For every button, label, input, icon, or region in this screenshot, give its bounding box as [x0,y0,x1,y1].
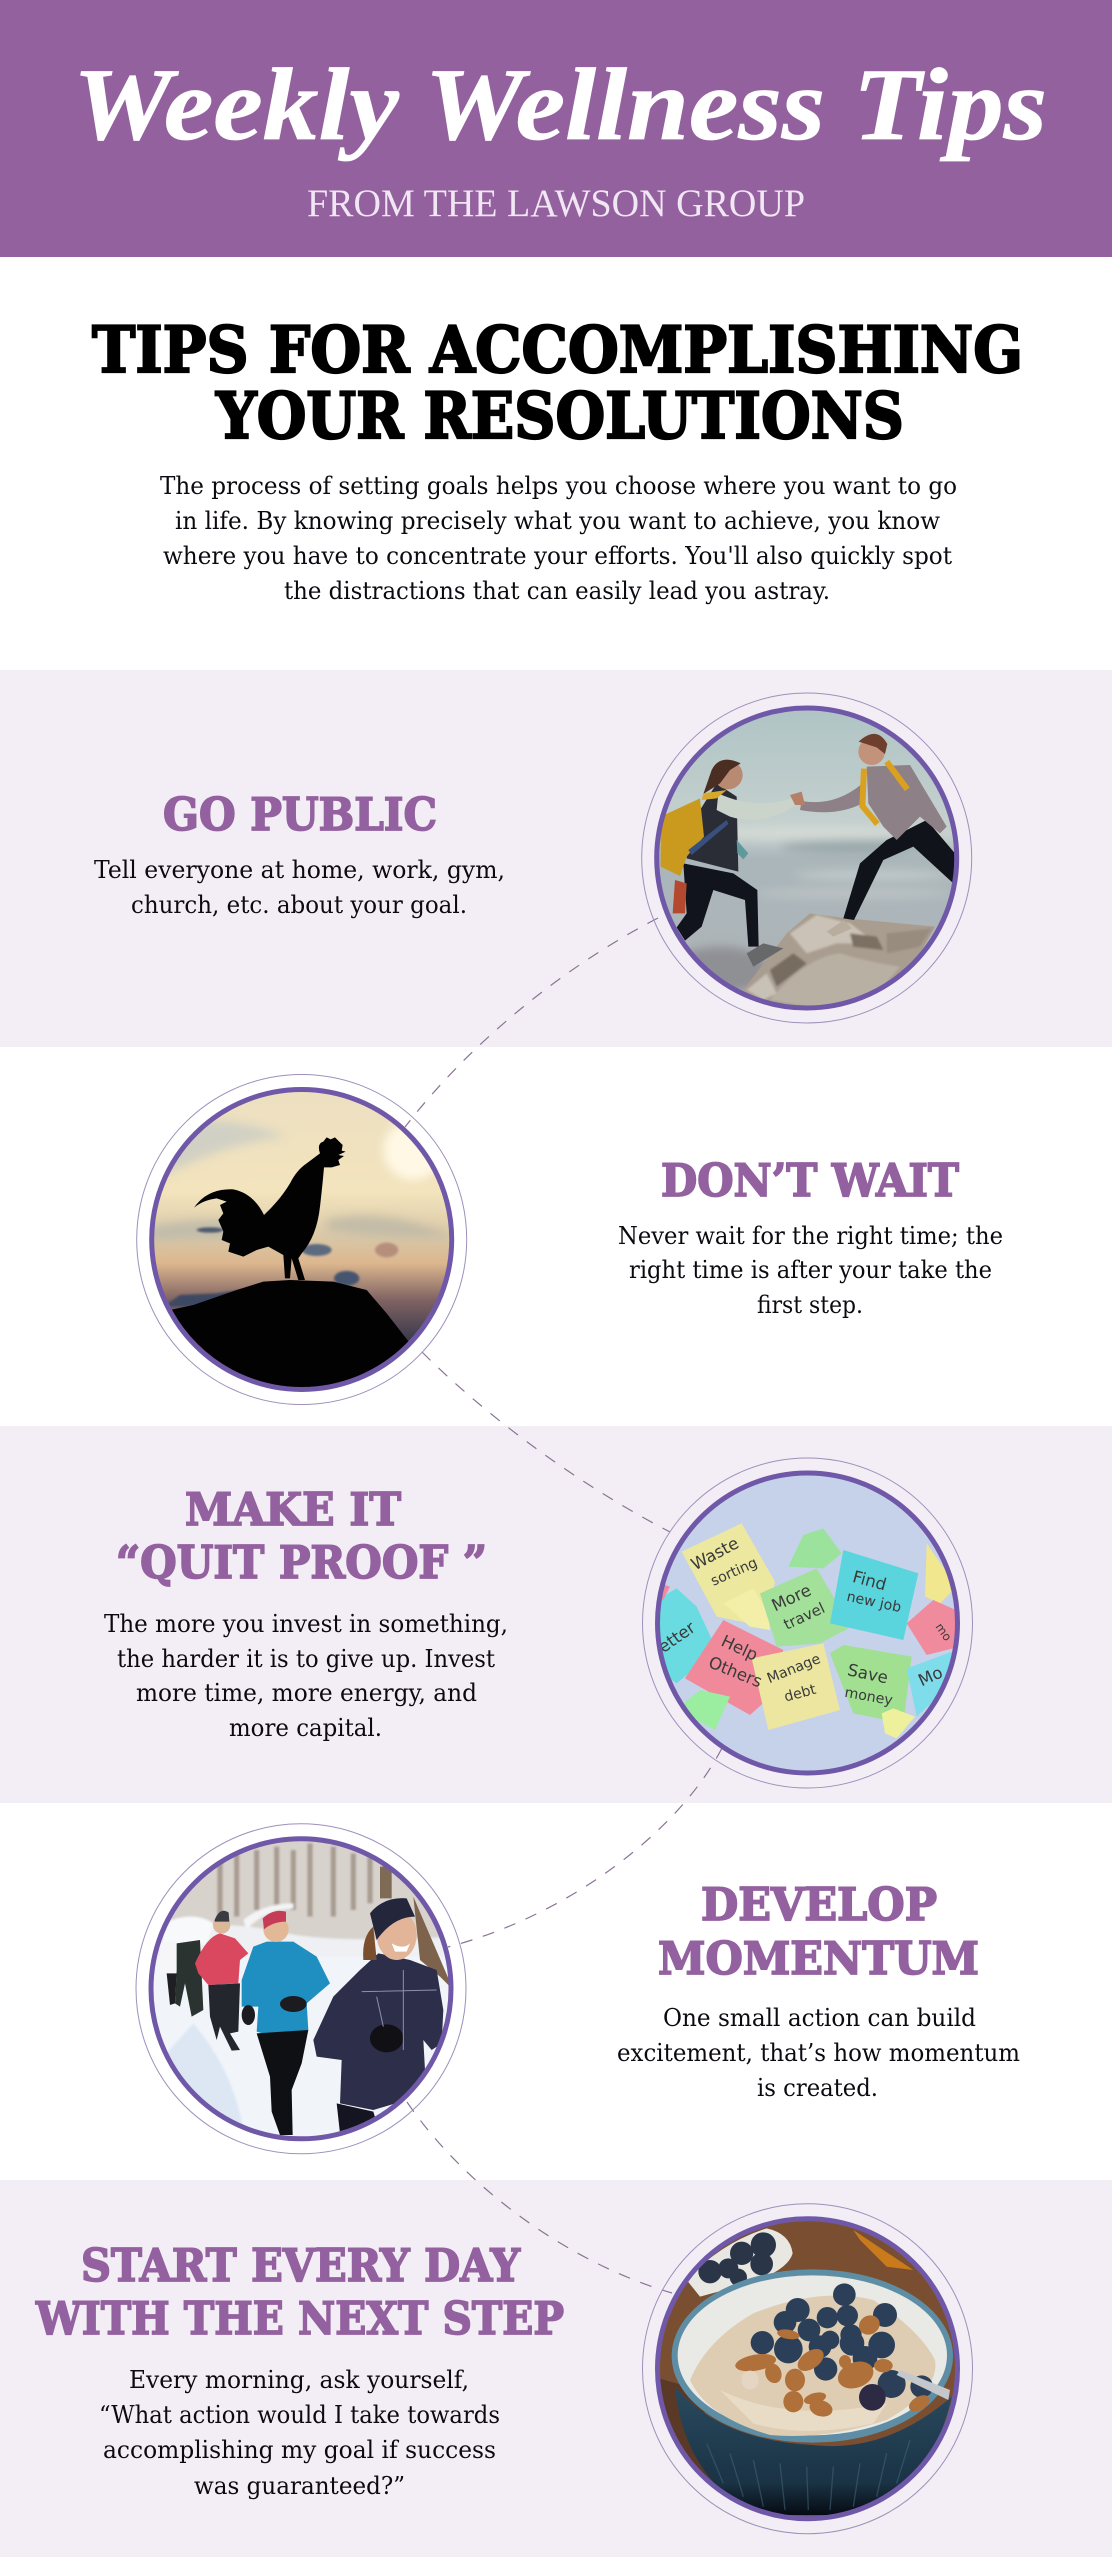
section: go public text [94,788,505,919]
photo: oatmeal bowl with berries [642,2204,972,2534]
handwriting on notes: Save [846,1660,890,1687]
section: don't wait text [618,1154,1003,1319]
thin ring [642,693,972,1023]
body: quit proof: more time, more energy, and [136,1679,477,1707]
thin ring [642,1458,972,1788]
body: start every day: accomplishing my goal if success [103,2436,496,2464]
photo: hikers helping each other [642,693,972,1023]
body: develop momentum: One small action can build [663,2004,976,2032]
thin ring [136,1824,466,2154]
thick ring [151,1839,451,2139]
body: develop momentum: excitement, that’s how momentum [617,2039,1020,2067]
heading: make it quit proof: MAKE IT [185,1483,401,1536]
body: start every day: Every morning, ask yourself, [129,2366,469,2394]
handwriting on notes: Help [718,1631,761,1665]
handwriting on notes: Manage [765,1651,823,1687]
handwriting on notes: money [843,1685,894,1709]
title: Weekly Wellness Tips [73,48,1047,162]
handwriting on notes: mo [933,1620,955,1644]
handwriting on notes: debt [783,1682,818,1706]
heading: don't wait: DON’T WAIT [661,1154,959,1207]
handwriting on notes: Waste [688,1533,742,1574]
background panel: band one [0,670,1112,1047]
thin ring [137,1074,467,1404]
heading: start every day [35,2239,564,2345]
heading: develop momentum: DEVELOP [701,1878,937,1931]
body: go public: Tell everyone at home, work, gym, [94,856,505,884]
handwriting on notes: new job [845,1589,903,1616]
handwriting on notes: Find [851,1567,889,1594]
photo: crumpled sticky notes [642,1458,972,1788]
body: quit proof: the harder it is to give up. Invest [117,1645,495,1673]
body: don't wait: first step. [757,1291,863,1319]
main heading: TIPS FOR ACCOMPLISHING [92,313,1023,388]
header banner [0,0,1112,257]
body: go public: church, etc. about your goal. [131,891,467,919]
handwriting on notes: sorting [708,1555,760,1590]
handwriting on notes: Others [706,1653,765,1691]
body: develop momentum: is created. [757,2074,878,2102]
intro paragraph [160,472,957,605]
body: start every day: was guaranteed?” [194,2472,405,2500]
body: develop momentum [617,2004,1020,2102]
thick ring [152,1090,452,1390]
heading: make it quit proof: “QUIT PROOF ” [116,1536,487,1589]
body: don't wait [618,1222,1003,1319]
dashed connector: quit proof to momentum [448,1748,722,1947]
body: start every day [99,2366,500,2500]
body: quit proof: more capital. [229,1714,382,1742]
thin ring [642,2204,972,2534]
intro paragraph: in life. By knowing precisely what you want to achieve, you know [175,507,940,535]
heading: start every day: WITH THE NEXT STEP [35,2292,564,2345]
body: go public [94,856,505,919]
background panel: band three [0,1426,1112,1803]
main heading: YOUR RESOLUTIONS [215,379,904,454]
heading: start every day: START EVERY DAY [81,2239,521,2292]
section: next step text [35,2239,564,2500]
handwriting on notes: travel [781,1599,828,1634]
body: quit proof: The more you invest in something, [104,1610,508,1638]
dashed connector: don't wait to quit proof [422,1352,670,1532]
thick ring [657,708,957,1008]
main heading [92,313,1023,454]
subtitle: FROM THE LAWSON GROUP [307,182,805,225]
dashed connector: go public to don't wait [405,918,658,1127]
heading: go public: GO PUBLIC [163,788,437,841]
photo: rooster silhouette at sunset [137,1074,467,1404]
dashed connector: momentum to next step [407,2102,672,2293]
heading: make it quit proof [116,1483,487,1589]
photo: runners in the snow [136,1824,466,2154]
handwriting on notes [655,1533,955,1709]
thick ring [658,1473,958,1773]
body: start every day: “What action would I take towards [99,2401,500,2429]
body: don't wait: right time is after your take the [629,1256,992,1284]
intro paragraph: the distractions that can easily lead you astray. [284,577,830,605]
intro paragraph: The process of setting goals helps you choose where you want to go [160,472,957,500]
handwriting on notes: etter [655,1618,699,1657]
body: don't wait: Never wait for the right time; the [618,1222,1003,1250]
heading: develop momentum [658,1878,979,1985]
body: quit proof [104,1610,508,1742]
handwriting on notes: Mo [915,1663,946,1690]
section: quit proof text [104,1483,508,1742]
heading: develop momentum: MOMENTUM [658,1932,979,1985]
handwriting on notes: More [769,1581,814,1615]
background panel: band five [0,2180,1112,2557]
section: develop momentum text [617,1878,1020,2102]
intro paragraph: where you have to concentrate your efforts. You'll also quickly spot [163,542,952,570]
thick ring [658,2219,958,2519]
